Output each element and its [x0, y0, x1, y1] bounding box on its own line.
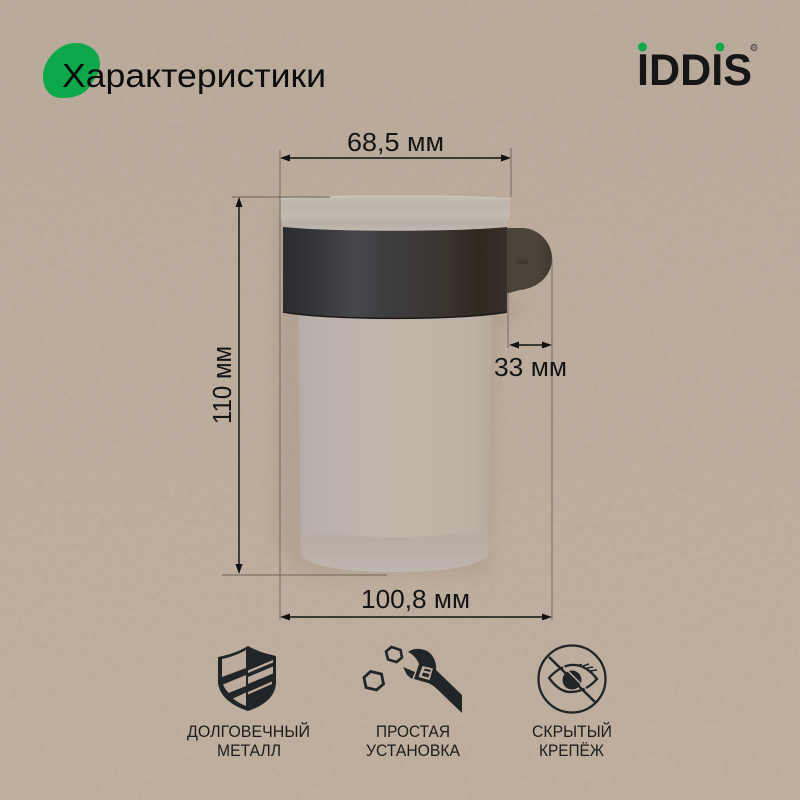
text: hidden mount: КРЕПЁЖ — [539, 742, 605, 760]
text: easy installation: ПРОСТАЯ — [376, 723, 450, 741]
icon: hidden eye — [538, 646, 606, 712]
dimension: 33 mm: 33 мм — [494, 354, 567, 382]
title: Характеристики — [62, 57, 326, 94]
text: durable metal: МЕТАЛЛ — [217, 742, 281, 760]
dimension: 68,5 mm — [222, 129, 552, 620]
wall bracket — [505, 228, 552, 294]
text: hidden mount — [532, 722, 612, 760]
glass rim — [280, 195, 510, 231]
title — [43, 43, 326, 98]
wall shadow — [272, 205, 530, 575]
dimension: 110 mm: 110 мм — [209, 346, 237, 424]
product: wall-mounted glass holder — [272, 195, 552, 575]
dimension: 100,8 mm — [280, 586, 552, 620]
icon: shield — [218, 646, 276, 711]
logo: IDDIS: IDDIS — [637, 46, 752, 95]
text: hidden mount: СКРЫТЫЙ — [532, 722, 612, 741]
dimension: 33 mm — [494, 342, 567, 382]
text: durable metal: ДОЛГОВЕЧНЫЙ — [187, 722, 310, 741]
green blob — [43, 43, 100, 98]
product: wall-mounted glass holder: iddis — [516, 260, 528, 266]
text: easy installation — [366, 723, 460, 760]
frosted glass body — [298, 310, 492, 572]
dimension: 68,5 mm: 68,5 мм — [347, 129, 444, 157]
dimension: 100,8 mm: 100,8 мм — [361, 586, 470, 614]
dimension: 110 mm — [209, 197, 242, 574]
text: durable metal — [187, 722, 310, 760]
black metal band — [283, 227, 507, 319]
icon: wrench and nuts — [364, 647, 462, 713]
logo: IDDIS: R — [752, 46, 756, 52]
text: easy installation: УСТАНОВКА — [366, 742, 460, 760]
